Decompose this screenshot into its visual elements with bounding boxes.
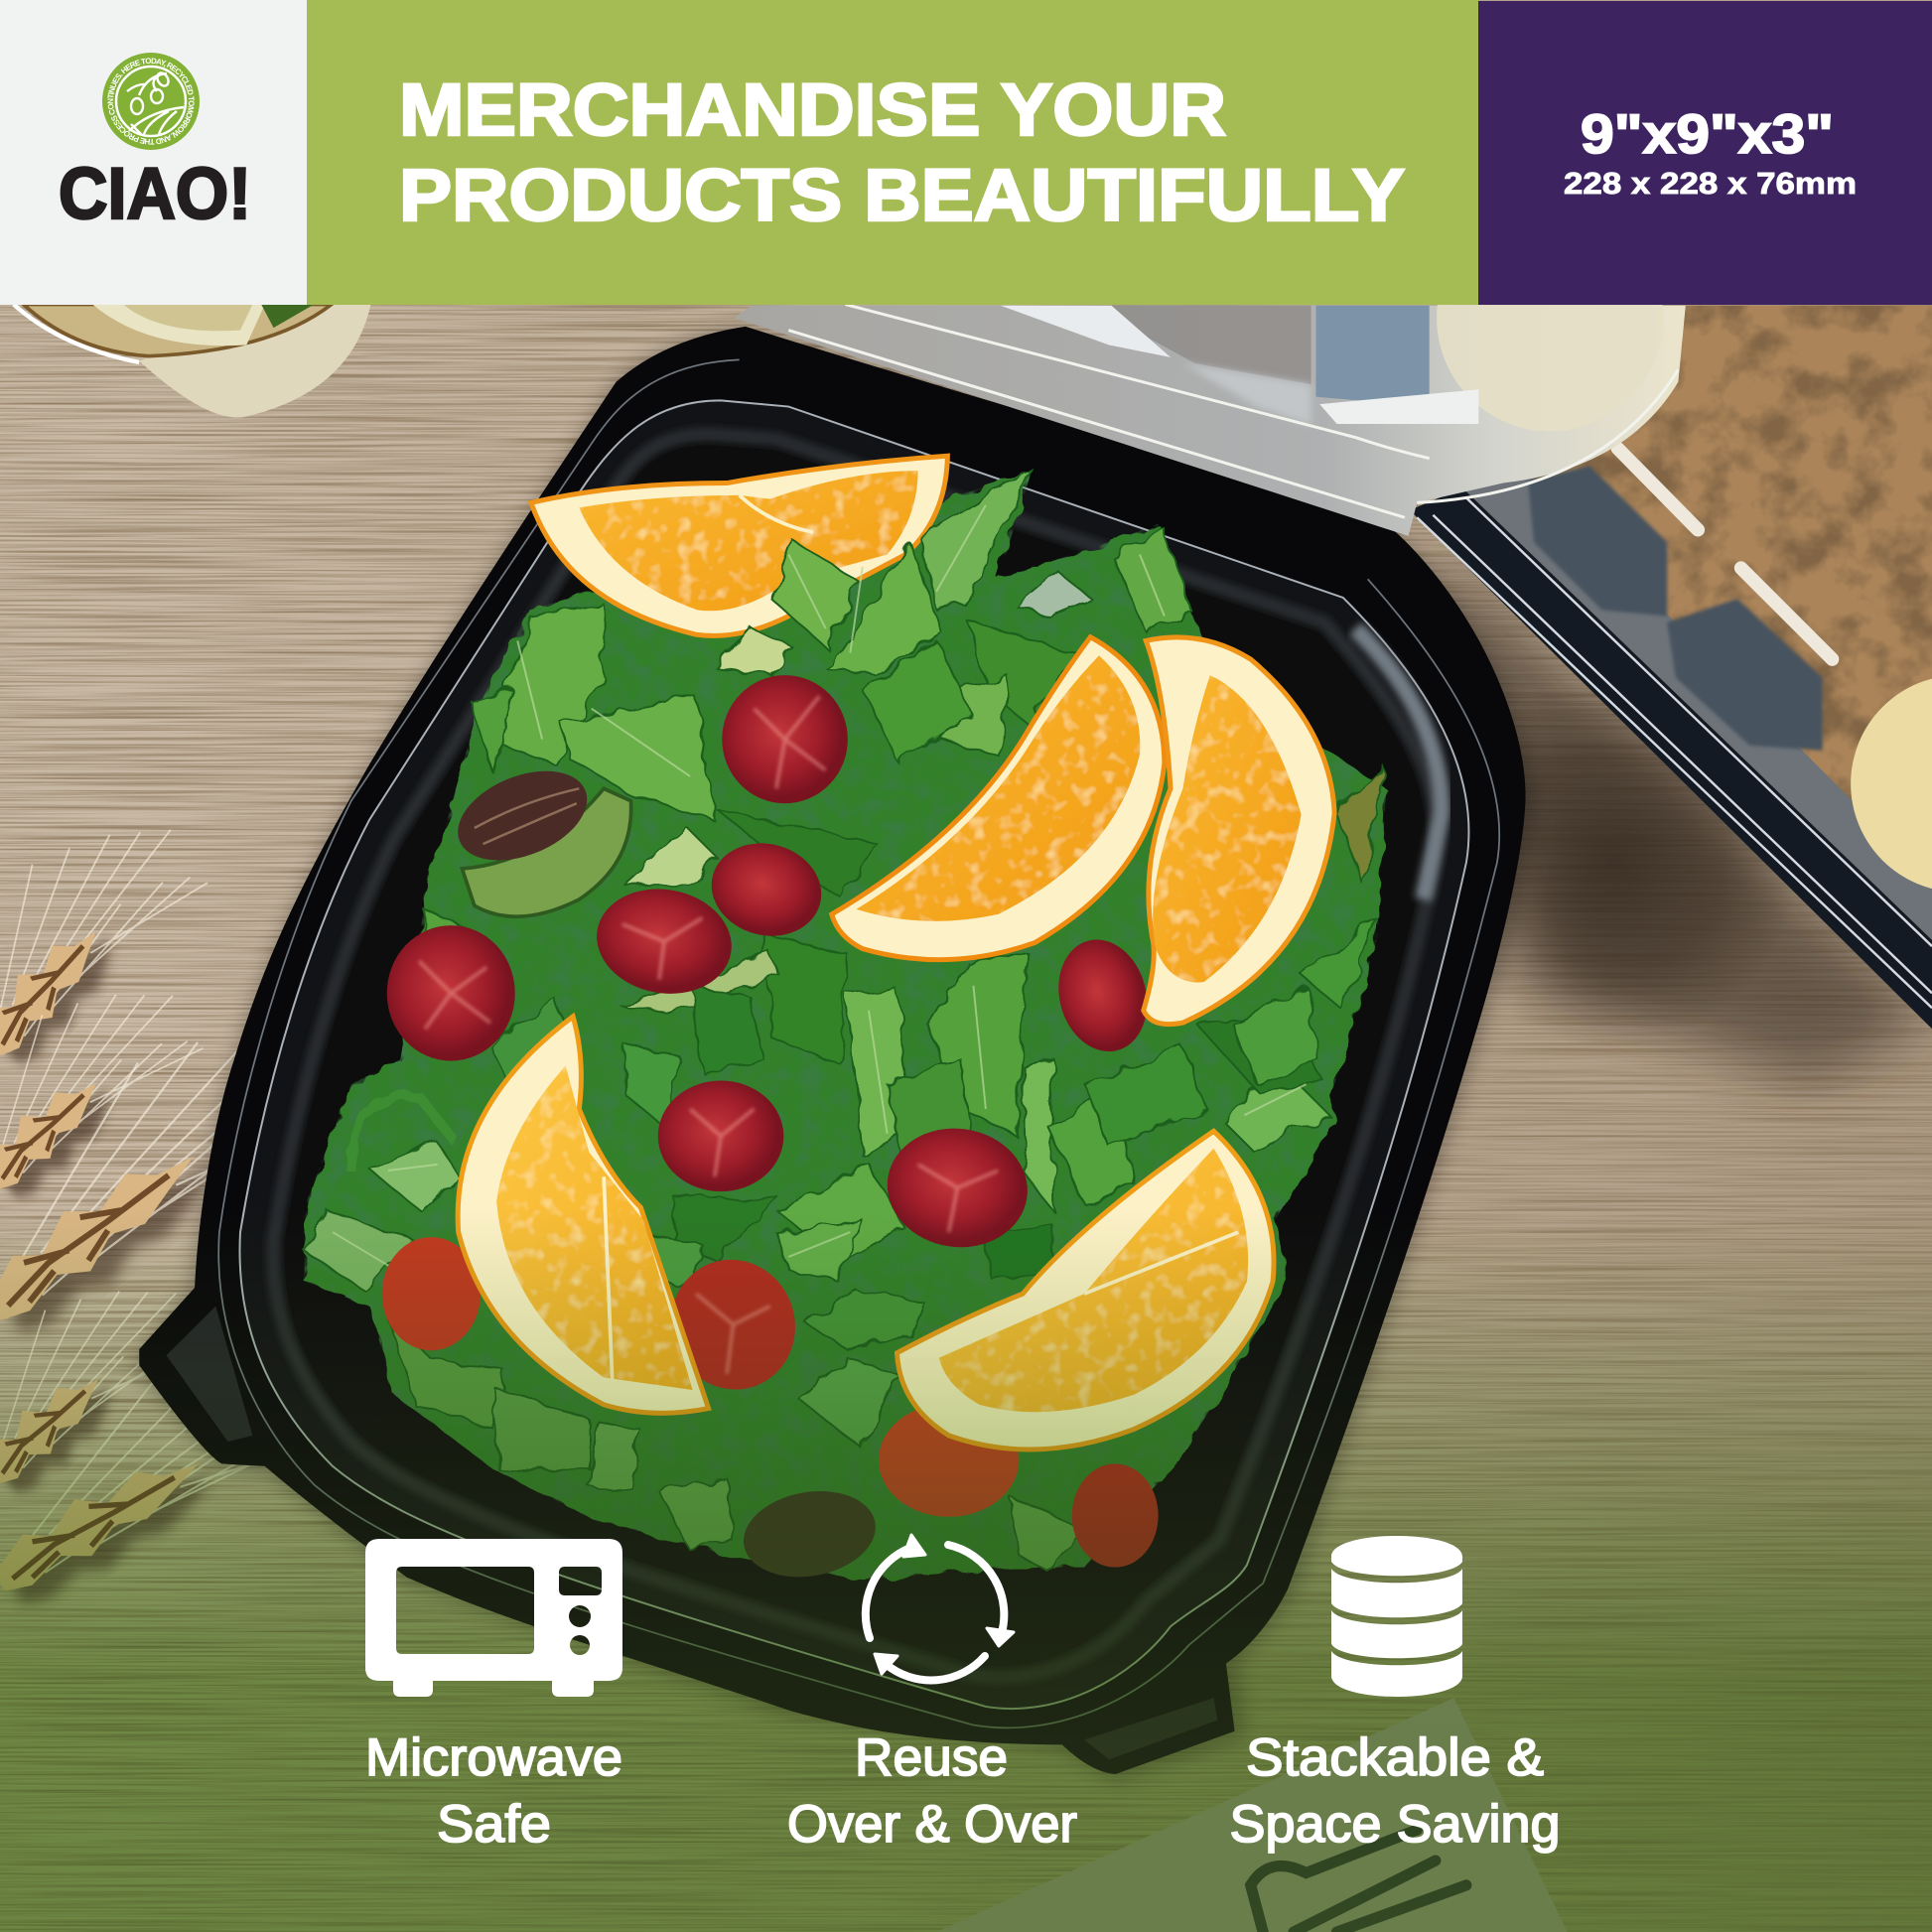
size text <box>1564 102 1857 201</box>
lettuce shadow texture <box>296 469 1405 1578</box>
lettuce base <box>305 472 1386 1580</box>
container shadow <box>133 327 1533 1782</box>
label: Reuse <box>855 1728 1008 1787</box>
feature: stackable and space saving <box>1229 1536 1561 1854</box>
title text: PRODUCTS BEAUTIFULLY <box>399 154 1405 236</box>
icon: microwave <box>365 1539 622 1697</box>
orange slice: lower left <box>458 1017 709 1413</box>
wheat stalks <box>0 776 392 1625</box>
header: purple size panel <box>1478 1 1932 305</box>
icon: stacked containers <box>1331 1536 1462 1697</box>
size text: 9"x9"x3" <box>1581 102 1834 165</box>
avocado and grape <box>445 754 631 916</box>
title text <box>399 69 1405 236</box>
napkin and fork <box>936 1698 1568 1932</box>
header: logo panel <box>0 0 307 305</box>
green fade overlay <box>0 1207 1932 1932</box>
label: Safe <box>437 1795 551 1854</box>
label: Stackable & <box>1246 1728 1544 1787</box>
logo emblem: HERE TODAY, RECYCLED TOMORROW. AND THE PROCESS CONTINUES. <box>107 58 195 145</box>
corner tabs <box>167 1307 252 1442</box>
outer rim <box>139 327 1526 1774</box>
logo wordmark: CIAO! <box>59 154 251 234</box>
lower-right tray with food <box>1410 306 1932 1029</box>
header: green title panel <box>307 0 1478 305</box>
label: Space Saving <box>1229 1795 1561 1854</box>
label: Over & Over <box>787 1795 1077 1854</box>
feature: reuse over and over <box>787 1535 1077 1854</box>
orange slice: centre <box>832 637 1165 960</box>
orange slice: lower right <box>897 1131 1274 1449</box>
black microwave container <box>133 327 1533 1782</box>
inner tray floor <box>239 400 1468 1709</box>
orange slice: top <box>531 456 947 635</box>
leaf veins <box>333 505 1307 1269</box>
drinking glass <box>14 305 371 418</box>
title text: MERCHANDISE YOUR <box>399 69 1226 151</box>
icon: circular arrows <box>866 1535 1014 1681</box>
cherry tomatoes <box>382 675 1160 1587</box>
lettuce leaves <box>305 470 1384 1571</box>
orange slice: right <box>1144 637 1334 1025</box>
label: Microwave <box>365 1728 622 1787</box>
clear lid <box>735 205 1686 536</box>
feature: microwave safe <box>365 1539 622 1854</box>
moulded cups <box>1528 466 1667 617</box>
salad <box>296 456 1405 1587</box>
size text: 228 x 228 x 76mm <box>1564 166 1857 201</box>
